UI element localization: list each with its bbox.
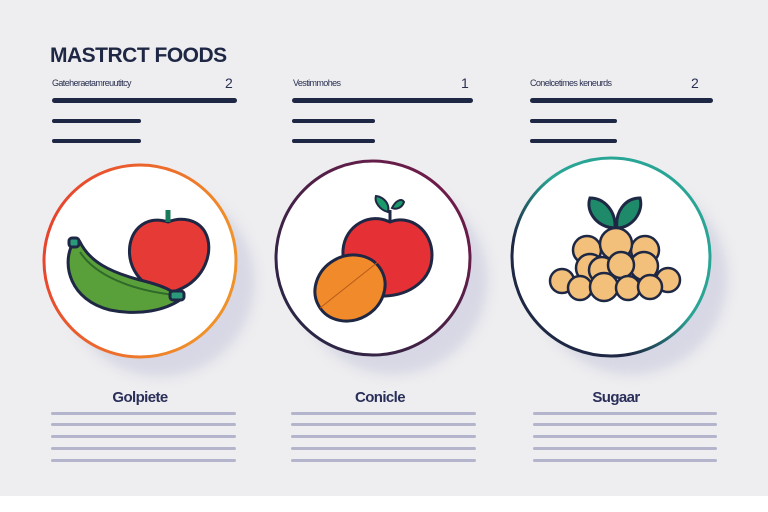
column 1 header: 2 bbox=[225, 75, 233, 91]
icon: leaves bbox=[589, 198, 641, 228]
icon: nut pile bbox=[550, 228, 680, 301]
column 2 header: Vestimmohes bbox=[293, 78, 342, 88]
text lines column 2 bbox=[291, 412, 476, 462]
column 3 header bbox=[530, 75, 713, 143]
column 1 header: Gateheraetamreuutitcy bbox=[52, 78, 132, 88]
panel 1: circle with banana and tomato bbox=[44, 165, 255, 377]
column 2 header: 1 bbox=[461, 75, 469, 91]
panel 3: circle with nuts bbox=[512, 158, 728, 375]
label: Golpiete: Golpiete bbox=[112, 389, 168, 406]
column 1 header bbox=[52, 75, 237, 143]
text lines column 1 bbox=[51, 412, 236, 462]
icon: banana bbox=[68, 238, 184, 312]
title: MASTRCT FOODS bbox=[50, 44, 227, 67]
icon: apple bbox=[343, 196, 432, 296]
label: Sugaar: Sugaar bbox=[592, 389, 640, 406]
icon: tomato bbox=[129, 210, 209, 292]
text lines column 3 bbox=[533, 412, 717, 462]
icon: peach bbox=[303, 242, 397, 334]
panel 2: circle with apple and peach bbox=[276, 161, 488, 375]
column 2 header bbox=[292, 75, 473, 143]
label: Conicle: Conicle bbox=[355, 389, 405, 406]
column 3 header: 2 bbox=[691, 75, 699, 91]
column 3 header: Conelcetimes keneurds bbox=[530, 78, 613, 88]
